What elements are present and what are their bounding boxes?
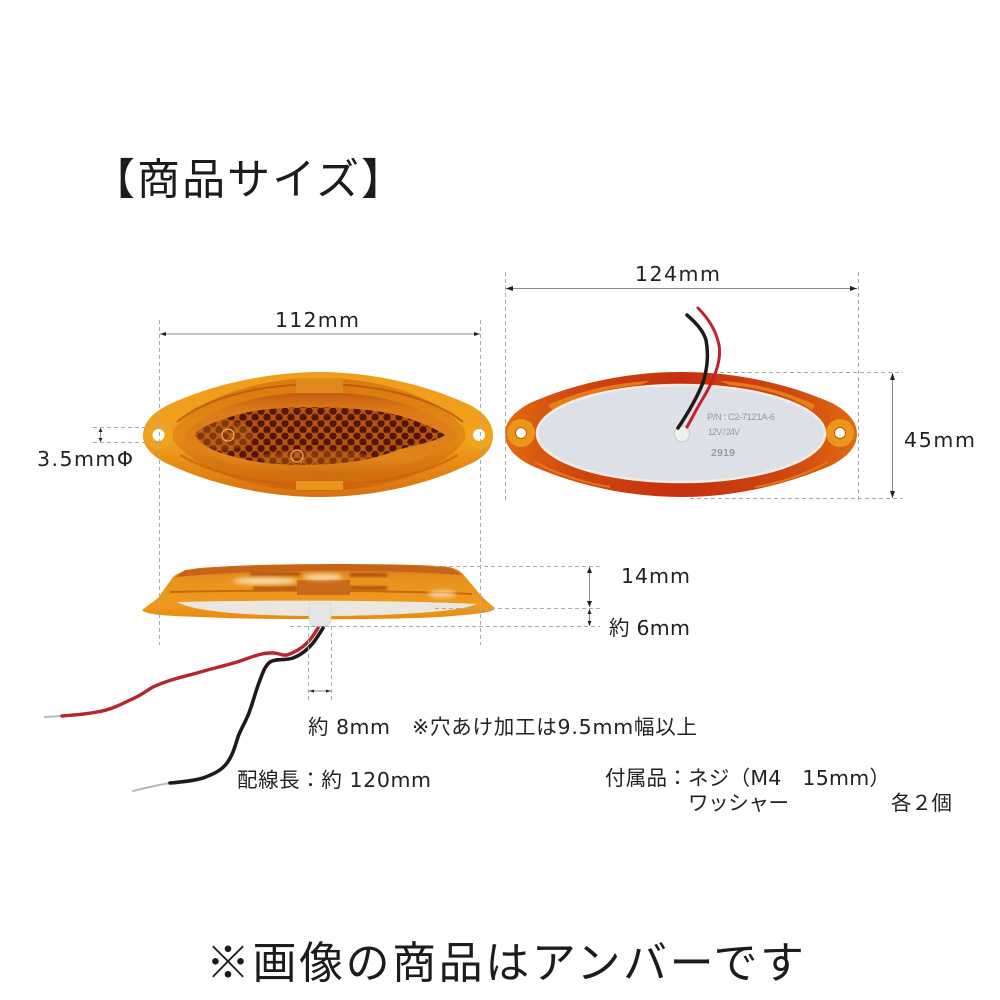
reflector lens — [195, 407, 445, 465]
product: back view lamp — [505, 308, 857, 497]
back label text: 12V / 24V — [708, 427, 740, 437]
label: about 6mm: 約 6mm — [609, 616, 690, 640]
back label text — [707, 412, 775, 459]
back label text: 2919 — [711, 447, 735, 459]
back label text: P/N : C2-7121A-6 — [707, 412, 775, 423]
accessories text: 付属品：ネジ（M4 15mm） — [605, 766, 890, 790]
product: side view lamp — [142, 564, 495, 627]
connector — [674, 426, 690, 442]
dimension arrows — [98, 286, 895, 692]
wires: red and black with stripped tips — [45, 628, 323, 791]
footer note: ※画像の商品はアンバーです — [206, 939, 804, 988]
mounting ears — [145, 421, 493, 449]
back wires — [678, 308, 720, 428]
note: hole width: ※穴あけ加工は9.5mm幅以上 — [412, 715, 697, 739]
label: about 8mm: 約 8mm — [308, 715, 390, 739]
label: 124mm: 124mm — [635, 262, 720, 286]
label: 45mm: 45mm — [904, 428, 975, 452]
title: 【商品サイズ】 — [92, 156, 404, 204]
connector — [309, 603, 331, 627]
label: 112mm: 112mm — [275, 308, 359, 332]
label: wire length: 配線長：約 120mm — [237, 768, 431, 792]
label: 14mm: 14mm — [621, 564, 690, 588]
label: 3.5mm hole: 3.5mmΦ — [37, 447, 133, 471]
product: front view lamp — [143, 372, 493, 497]
accessories text: 各２個 — [891, 791, 952, 815]
dimension guide lines — [93, 272, 903, 702]
accessories text: ワッシャー — [688, 791, 789, 815]
accessories text — [605, 766, 952, 815]
